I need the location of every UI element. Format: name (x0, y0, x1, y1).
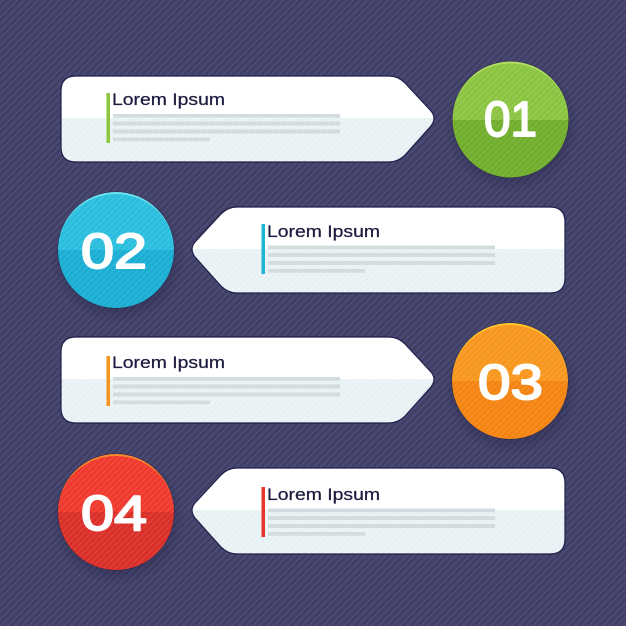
accent bar: red (262, 487, 265, 537)
panel: item 1 card (60, 76, 440, 164)
badge: 04: 04 (81, 487, 147, 541)
heading: item 2: Lorem Ipsum (267, 222, 380, 241)
panel: item 3 card (60, 337, 440, 425)
badge: 02 (58, 192, 178, 316)
accent bar: orange (106, 356, 110, 406)
text lines: item 1 (113, 114, 340, 141)
badge: 04 (58, 454, 178, 578)
text lines: item 3 (113, 377, 340, 404)
accent bar: blue (262, 224, 265, 274)
accent bar: green (106, 93, 110, 143)
heading: item 1: Lorem Ipsum (112, 90, 225, 109)
panel: item 2 card (188, 207, 568, 295)
heading: item 4: Lorem Ipsum (267, 485, 380, 504)
badge: 03 (452, 322, 572, 448)
text lines: item 4 (268, 508, 495, 536)
badge: 01: 01 (484, 93, 537, 147)
text lines: item 2 (268, 246, 495, 273)
badge: 02: 02 (81, 225, 147, 279)
panel: item 4 card (188, 468, 568, 556)
heading: item 3: Lorem Ipsum (112, 353, 225, 372)
badge: 03: 03 (478, 356, 543, 410)
badge: 01 (452, 61, 572, 186)
